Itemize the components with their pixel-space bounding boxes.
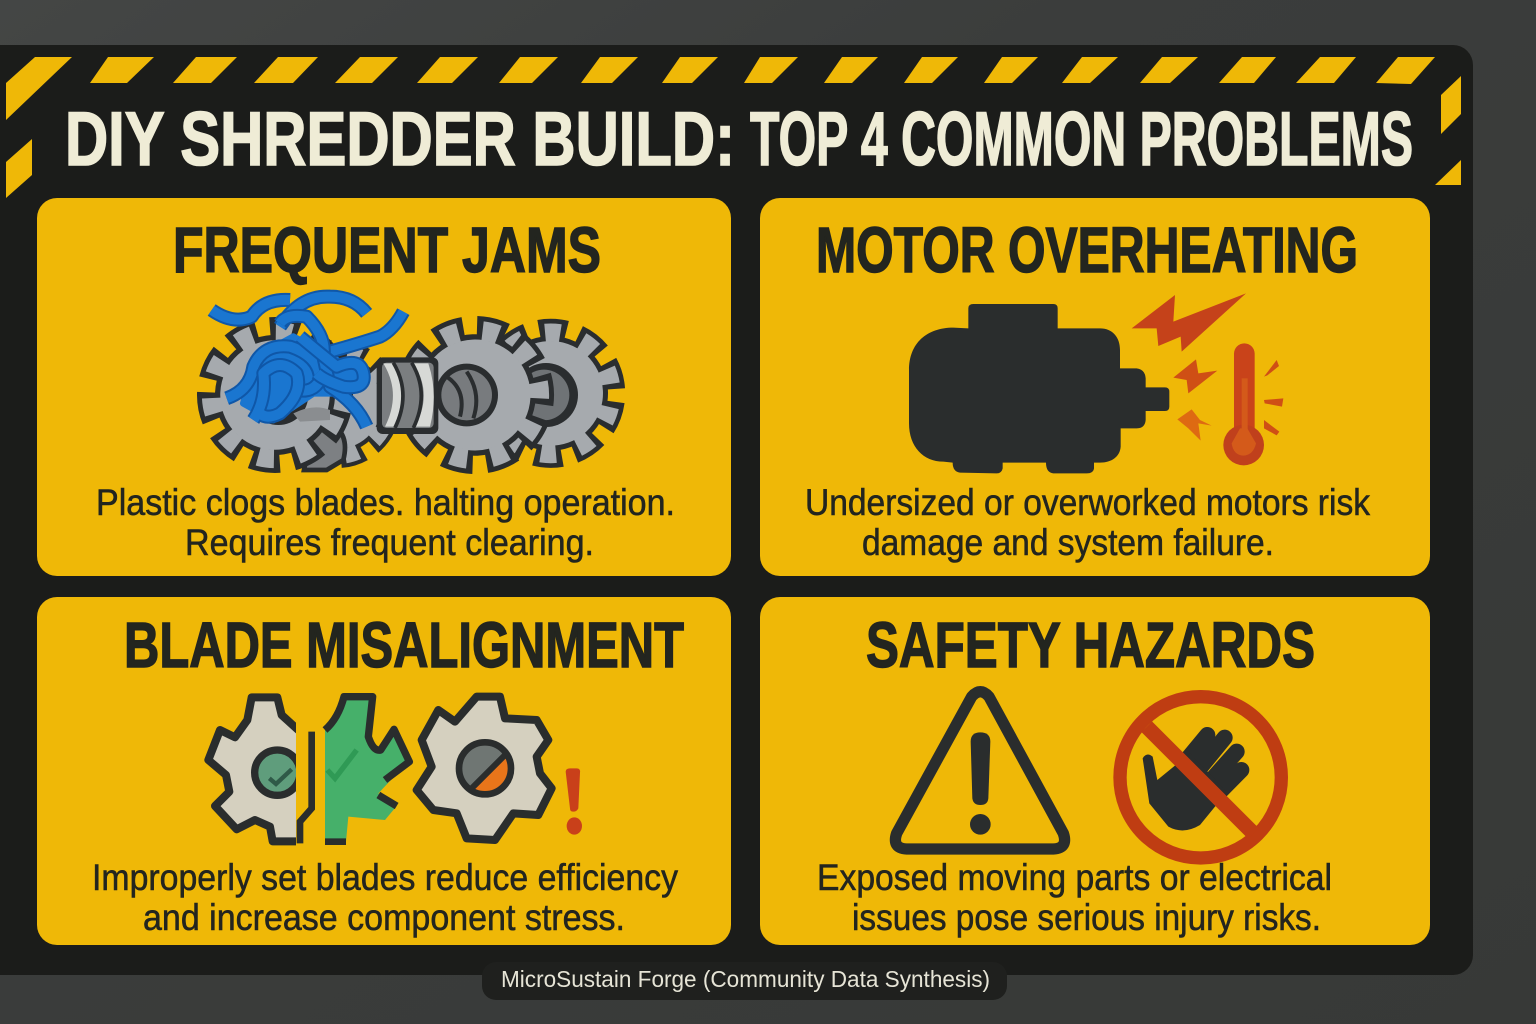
source caption — [482, 962, 1007, 1000]
description: motor overheating: damage and system failure. — [862, 522, 1274, 563]
description: safety hazards — [817, 857, 1332, 938]
description: blade misalignment: and increase component stress. — [143, 897, 625, 938]
panel: motor overheating — [760, 198, 1430, 576]
panel: frequent jams — [37, 198, 731, 576]
description: safety hazards: issues pose serious injury risks. — [852, 897, 1321, 938]
panel: blade misalignment — [37, 597, 731, 945]
description: blade misalignment — [92, 857, 678, 938]
description: frequent jams: Plastic clogs blades. halting operation. — [96, 482, 675, 523]
icon: gears jammed with blue plastic — [198, 297, 619, 478]
heading: blade misalignment: BLADE MISALIGNMENT — [124, 609, 684, 681]
source caption: MicroSustain Forge (Community Data Synthesis) — [501, 966, 990, 992]
description: safety hazards: Exposed moving parts or electrical — [817, 857, 1332, 898]
title — [65, 97, 1413, 182]
hazard stripe border — [6, 57, 1461, 198]
icon: aligned and misaligned gears — [208, 697, 582, 843]
icon: warning triangle — [895, 692, 1065, 849]
description: motor overheating: Undersized or overworked motors risk — [805, 482, 1370, 523]
icon: overheating motor with sparks and thermometer — [909, 293, 1283, 473]
heading: safety hazards: SAFETY HAZARDS — [866, 609, 1315, 681]
icon: no hands prohibition sign — [1120, 697, 1281, 858]
title: DIY SHREDDER BUILD: — [65, 97, 735, 182]
heading: motor overheating: MOTOR OVERHEATING — [816, 214, 1358, 286]
description: blade misalignment: Improperly set blades reduce efficiency — [92, 857, 678, 898]
panel: safety hazards — [760, 597, 1430, 945]
description: frequent jams — [96, 482, 675, 563]
heading: frequent jams: FREQUENT JAMS — [173, 214, 601, 286]
description: frequent jams: Requires frequent clearing. — [185, 522, 594, 563]
description: motor overheating — [805, 482, 1370, 563]
